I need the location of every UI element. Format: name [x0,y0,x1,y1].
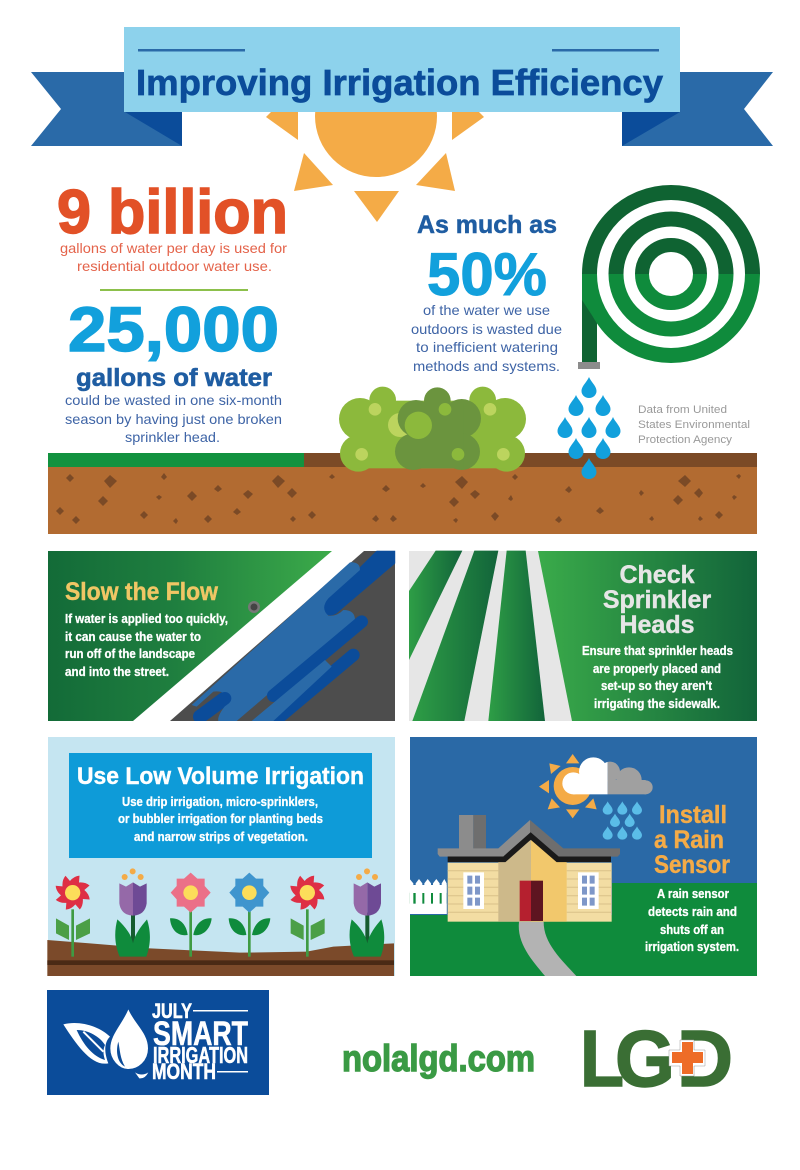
stat: 50% [411,211,562,374]
text: check sprinkler heads: Sprinkler [603,586,711,614]
ribbon tails [31,72,773,146]
logo: July Smart Irrigation Month: JULY [152,1000,192,1023]
icon: sun behind cloud [539,754,597,818]
stat: 25,000 gallons: season by having just one broken [65,411,282,427]
text: install a rain sensor: irrigation system. [645,940,739,954]
text: install a rain sensor: shuts off an [660,923,724,937]
panel: check sprinkler heads [409,551,757,721]
title banner [124,27,680,112]
stat: 25,000 gallons: could be wasted in one six-month [65,392,282,408]
text: slow the flow: If water is applied too quickly, [65,612,228,626]
icon: sprinkler head [248,601,260,613]
panel: slow the flow [48,551,395,725]
logo: July Smart Irrigation Month: SMART [153,1015,248,1053]
stat: 50%: to inefficient watering [416,339,558,355]
text: check sprinkler heads: Check [619,561,695,589]
illustration: flower bed [47,868,394,976]
icon: path [519,922,576,976]
text: slow the flow: it can cause the water to [65,630,201,644]
text: check sprinkler heads: are properly placed and [593,662,721,676]
text: check sprinkler heads: Ensure that sprinkler heads [582,644,733,658]
text box: low volume irrigation: Use Low Volume Irrigation [77,763,364,790]
website link: nolalgd.com [342,1038,535,1079]
text: slow the flow: Slow the Flow [65,578,219,606]
text box: low volume irrigation: Use drip irrigation, micro-sprinklers, [122,795,318,809]
text: check sprinkler heads: irrigating the sidewalk. [594,697,720,711]
stat: 50%: methods and systems. [413,358,560,374]
text: slow the flow [65,578,228,679]
illustration: water running into the street [192,551,395,725]
stat: 25,000 gallons: gallons of water [76,364,272,392]
source note: Protection Agency [638,434,733,446]
stat: 50%: 50% [427,241,547,308]
title banner: Improving Irrigation Efficiency [136,62,663,103]
text: install a rain sensor: Install [659,801,727,829]
stat: 9 billion: 9 billion [57,178,288,247]
logo: LGD: D [677,1014,733,1103]
source note [638,404,750,446]
icon: picket fence [410,879,447,914]
logo: LGD: L [580,1014,624,1103]
panel: use low volume irrigation [47,737,395,976]
stat: 50%: As much as [417,211,557,239]
panel: install a rain sensor [410,737,757,976]
text: slow the flow: run off of the landscape [65,647,195,661]
text box: low volume irrigation: and narrow strips of vegetation. [134,830,308,844]
stat: 25,000 gallons: sprinkler head. [125,429,220,445]
logo: July Smart Irrigation Month: MONTH [152,1059,216,1084]
text box: low volume irrigation [69,753,372,858]
icon: house [438,815,620,922]
source note: States Environmental [638,419,750,431]
stat: 9 billion: gallons of water per day is used for [60,240,287,256]
text: slow the flow: and into the street. [65,665,169,679]
icon: cloud [562,757,653,794]
illustration: sprinkler stripes [409,551,545,721]
icon: sun [266,55,484,222]
text: check sprinkler heads [582,561,733,711]
text: install a rain sensor [645,801,739,954]
icon: bushes [339,387,526,472]
stat: 50%: outdoors is wasted due [411,321,562,337]
stat: 9 billion: residential outdoor water use. [77,258,272,274]
stat: 25,000 gallons: 25,000 [68,295,279,365]
text: install a rain sensor: detects rain and [648,905,737,919]
stat: 25,000 gallons [65,295,282,445]
source note: Data from United [638,404,727,416]
logo: July Smart Irrigation Month [47,990,269,1095]
illustration: house, fence, sun and cloud [410,754,653,976]
text: install a rain sensor: A rain sensor [657,887,729,901]
icon: coiled hose [578,192,752,369]
icon: water drops [558,377,620,479]
text: check sprinkler heads: set-up so they aren't [601,679,713,693]
stat: 50%: of the water we use [423,302,550,318]
text: install a rain sensor: Sensor [654,851,730,879]
logo: LGD [580,1014,733,1103]
icon: rain drops [603,801,642,840]
text: check sprinkler heads: Heads [619,611,695,639]
ground [48,453,757,534]
text: install a rain sensor: a Rain [654,826,724,854]
logo: LGD: G [615,1014,675,1103]
logo: July Smart Irrigation Month: IRRIGATION [153,1042,248,1068]
text box: low volume irrigation: or bubbler irrigation for planting beds [118,812,323,826]
